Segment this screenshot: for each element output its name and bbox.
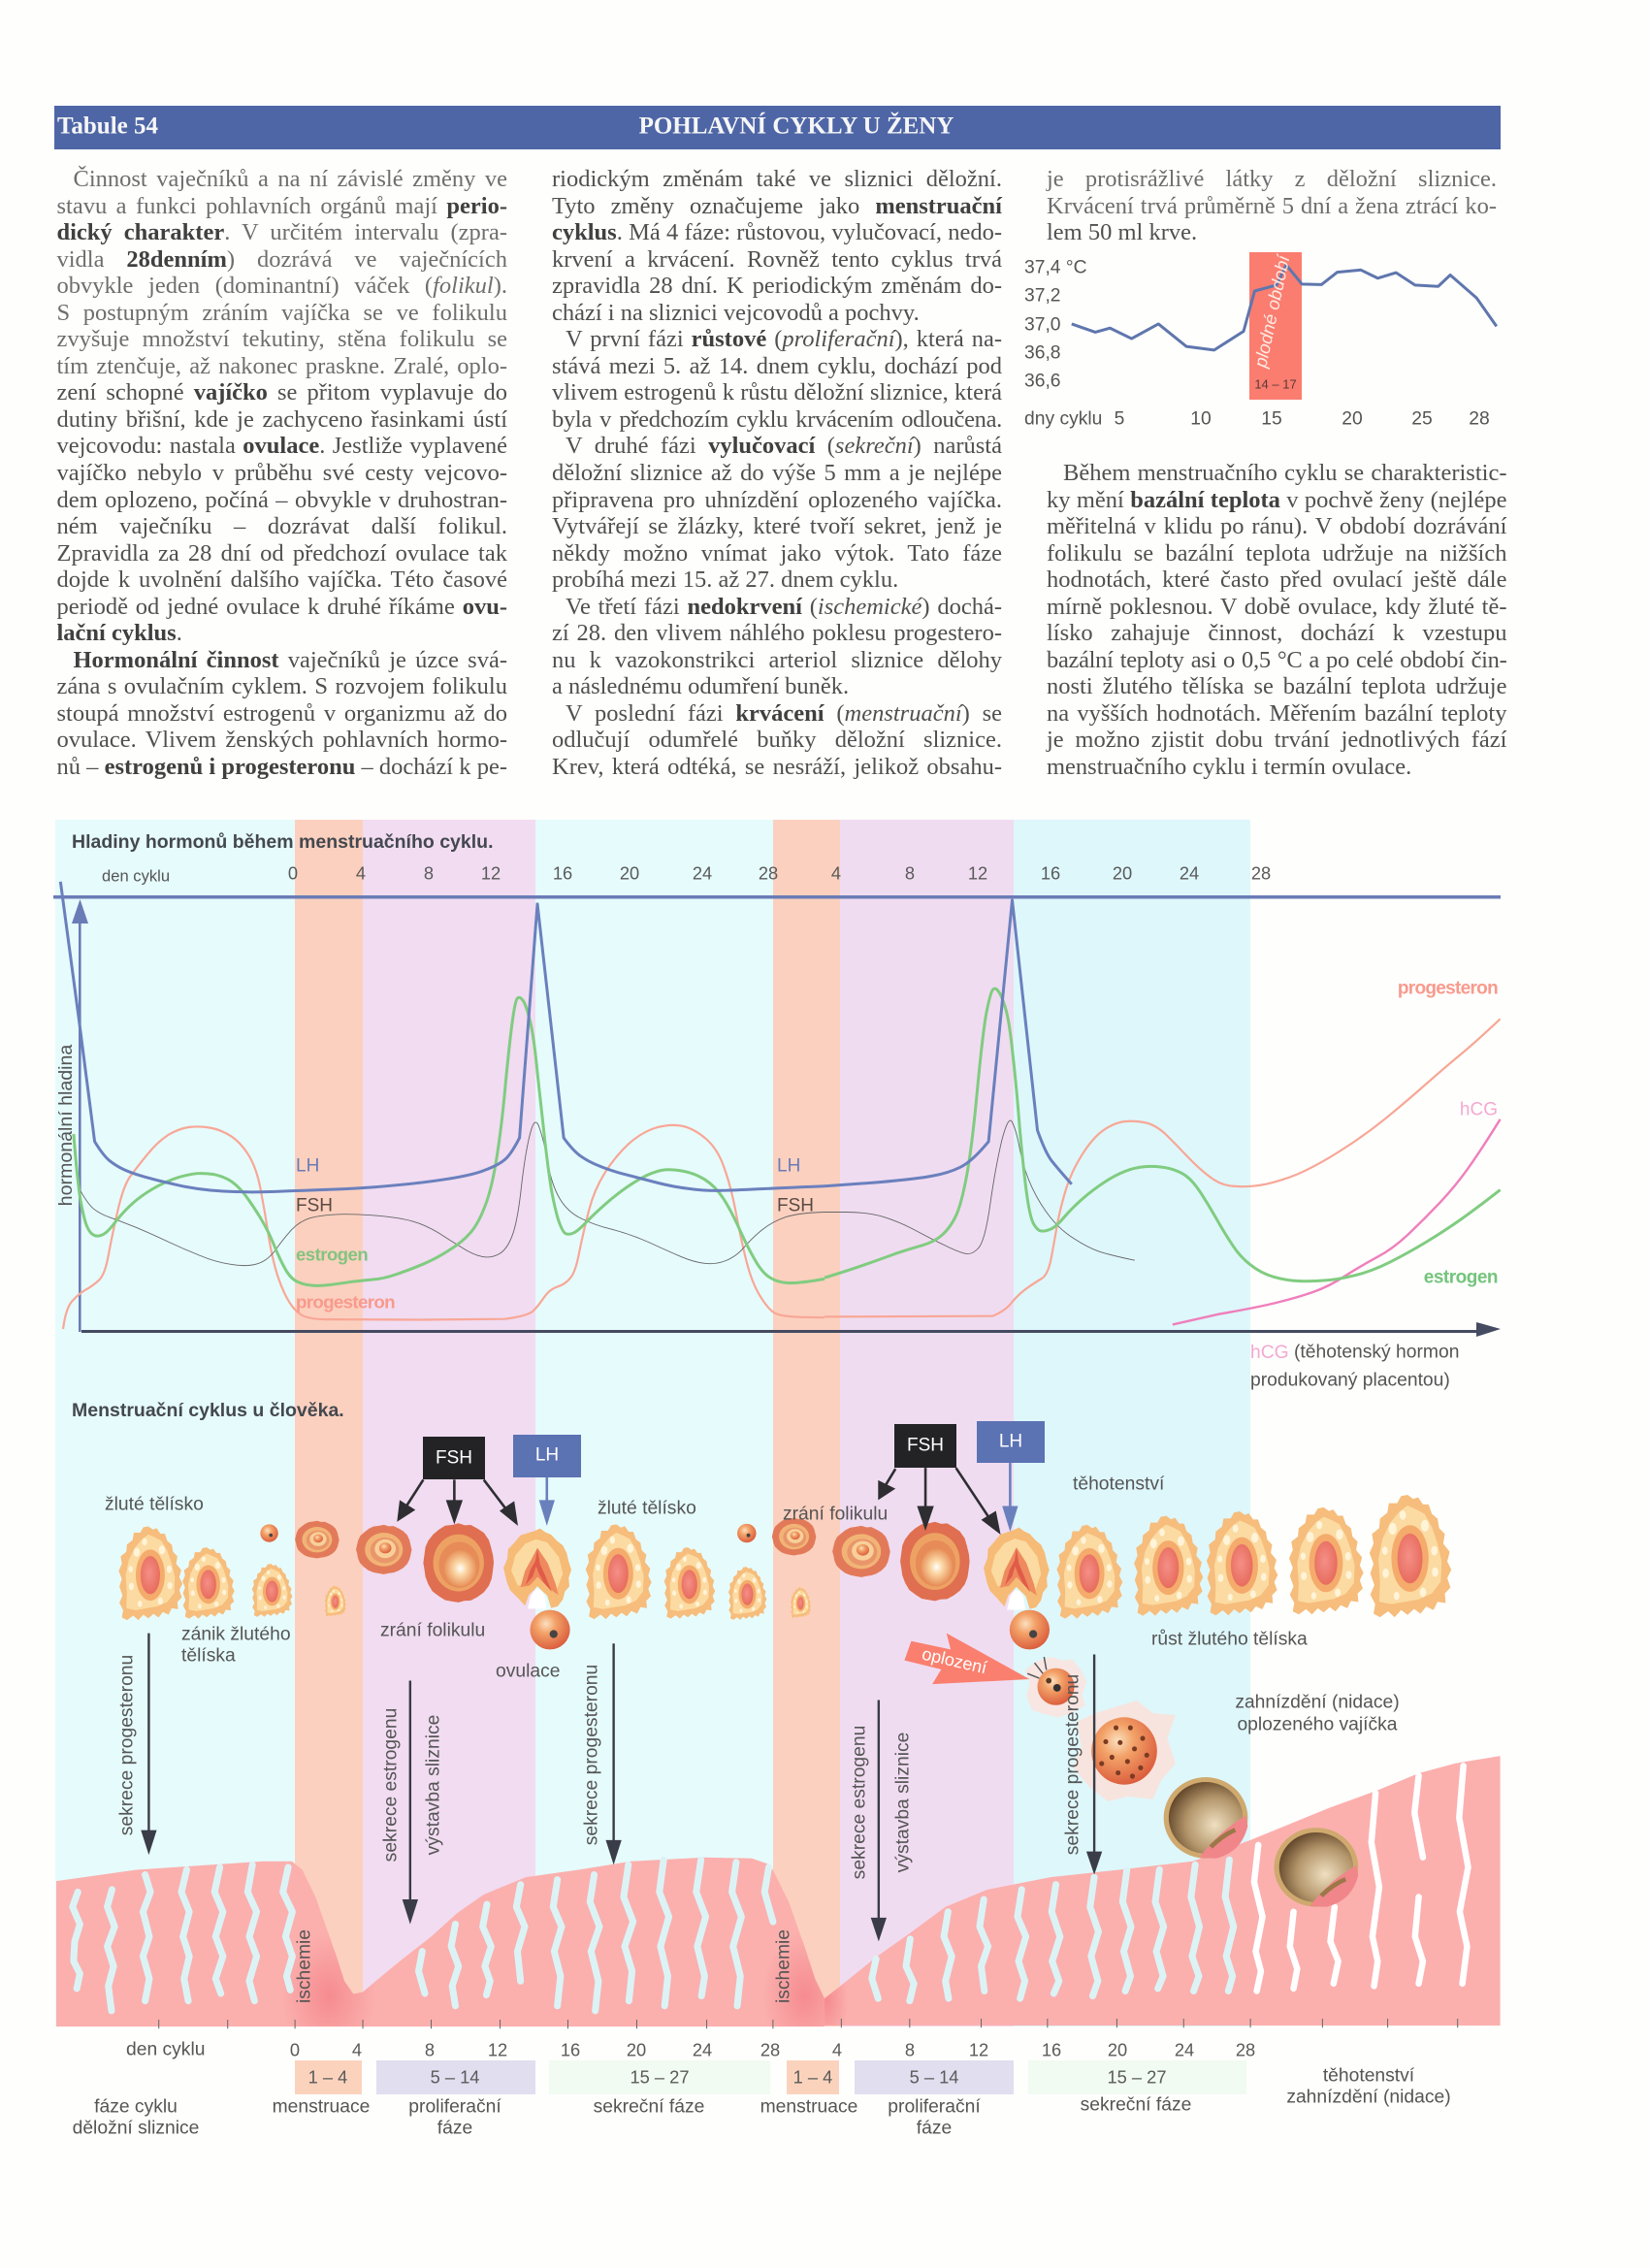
ovary and secretion labels: oplození [921,1644,988,1677]
text column 1: zvyšuje množství tekutiny, stěna folikulu se [56,326,507,352]
ovary and secretion labels: ischemie [295,1929,314,2003]
icon: blastocyst implanted [1274,1828,1358,1907]
ovary and secretion labels: ovulace [496,1661,560,1682]
phase labels: proliferační [408,2097,501,2117]
ovary and secretion labels: žluté tělísko [598,1498,696,1519]
text column 3 bottom: nosti žlutého tělíska se bazální teplota udržuje [1047,673,1507,699]
curve labels: LH [296,1156,319,1176]
chart: basal temperature: 28 [1469,409,1490,429]
ovary and secretion labels: výstavba sliznice [423,1715,444,1855]
top day axis labels: 12 [968,863,987,883]
box: FSH [423,1437,485,1479]
text column 1 [56,165,507,780]
top day axis labels: 28 [1251,863,1271,883]
curve labels: progesteron [1398,978,1498,999]
secretion arrows [141,1634,1102,1941]
text column 1: stoupá množství estrogenů v organizmu až do [56,700,507,727]
phase range boxes: 5 – 14 [910,2066,958,2088]
temperature line [1072,265,1497,350]
curve labels: FSH [296,1195,333,1216]
icon: corpus luteum regressing [118,1526,346,1620]
ovary and secretion labels: sekrece progesteronu [1063,1674,1083,1855]
phase labels: menstruace [273,2097,370,2117]
bottom day axis [126,2039,1255,2060]
text column 2: cyklus. Má 4 fáze: růstovou, vylučovací, nedo- [552,219,1002,245]
top day axis labels [102,863,1271,885]
text column 3 bottom: hodnotách, které často před ovulací ještě dále [1047,567,1507,593]
bottom day axis: 20 [627,2039,646,2060]
icon: ovulating follicle [503,1529,571,1608]
header: title: POHLAVNÍ CYKLY U ŽENY [639,113,954,140]
ovary and secretion labels: těhotenství [1073,1474,1165,1494]
bottom day axis: 16 [561,2039,580,2060]
icon: corpus luteum second cycle [586,1524,811,1620]
ovary and secretion labels: sekrece estrogenu [850,1726,869,1879]
text column 1: zána s ovulačním cyklem. S rozvojem folikulu [56,673,507,699]
phase range boxes: 15 – 27 [630,2066,689,2088]
text column 1: vejcovodu: nastala ovulace. Jestliže vyplavené [56,433,507,459]
box: LH: LH [535,1445,559,1465]
text column 2: připravena pro uhnízdění oplozeného vajíčka. [552,487,1002,513]
text column 2: V první fázi růstové (proliferační), která na- [566,326,1002,352]
top day axis labels: 16 [1041,863,1060,883]
text column 3 bottom: je možno zjistit dobu trvání jednotlivých fází [1047,727,1507,753]
cycle background bands [55,820,1250,2026]
text column 2 [552,166,1003,780]
hormone boxes and arrows, second cycle [878,1421,1045,1535]
text column 3 bottom: bazální teploty asi o 0,5 °C a po celé období čin- [1047,647,1507,673]
top day axis labels: 12 [481,863,501,883]
text column 2: Ve třetí fázi nedokrvení (ischemické) dochá- [566,594,1002,620]
chart: basal temperature: 37,4 °C [1024,258,1087,277]
chart: basal temperature [1024,252,1497,429]
phase labels [73,2066,1451,2138]
phase range boxes: 15 – 27 [1108,2066,1166,2088]
curve labels: estrogen [1424,1267,1498,1288]
phase labels: děložní sliznice [73,2119,199,2138]
ovary and secretion labels: žluté tělísko [105,1494,204,1515]
text column 2: zpravidla 28 dní. K periodickým změnám do- [552,273,1002,299]
phase range boxes: 5 – 14 [431,2066,479,2088]
text column 2: chází i na sliznici vejcovodů a pochvy. [552,300,920,326]
bottom day axis: 12 [969,2039,988,2060]
text column 2: Krev, která odtéká, se nesráží, jelikož obsahu- [552,754,1002,780]
chart: basal temperature: 5 [1115,409,1124,429]
bottom day axis: 8 [905,2039,915,2060]
curves first part [60,882,824,1329]
chart: hormone levels [53,863,1501,1391]
ovary and secretion labels: sekrece estrogenu [380,1708,402,1862]
text column 1: periodě od jedné ovulace k druhé říkáme ovu- [56,594,507,620]
arrow: fertilization [904,1634,1029,1684]
top day axis labels: 8 [905,863,915,883]
text column 1: Činnost vaječníků a na ní závislé změny ve [74,166,507,192]
curve labels [296,978,1498,1312]
text column 3 bottom [1046,460,1507,780]
icon: morula [1073,1701,1176,1801]
text column 3 bottom: folikulu se bazální teplota udržuje na nižších [1047,540,1507,567]
hormone boxes and arrows, first cycle [397,1435,581,1526]
text column 1: dojde k uvolnění dalšího vajíčka. Této časové [56,567,507,593]
arrows: hormone action [878,1463,1018,1535]
text column 3 bottom: lísko zahajuje činnost, dochází k vzestupu [1047,620,1507,646]
text column 3 bottom: mírně poklesnou. V době ovulace, kdy žluté tě- [1047,594,1507,620]
bottom day axis: 4 [352,2039,362,2060]
ovary and secretion labels: tělíska [181,1645,236,1667]
text column 2: děložní sliznice až do výše 5 mm a je nejlépe [552,460,1002,486]
chart: basal temperature: 36,6 [1024,371,1061,392]
phase range boxes [295,2060,1246,2094]
text column 2: zí 28. den vlivem náhlého poklesu progestero- [552,620,1002,646]
text column 3 bottom: ky mění bazální teplota v pochvě ženy (nejlépe [1047,487,1506,513]
curve labels: LH [777,1156,800,1176]
text column 3 top: je protisrážlivé látky z děložní sliznice. [1047,166,1497,192]
text column 1: zení schopné vajíčko se přitom vyplavuje do [56,379,507,405]
bottom day axis: den cyklu [126,2039,205,2060]
text column 2: V poslední fázi krvácení (menstruační) se [566,700,1002,727]
box: FSH: FSH [436,1447,472,1469]
top day axis labels: 4 [356,863,366,883]
bottom day axis: 28 [1236,2039,1255,2060]
text column 3 top: Krvácení trvá průměrně 5 dní a žena ztrácí ko- [1047,193,1497,219]
text column 3 bottom: Během menstruačního cyklu se charakteristic- [1063,460,1507,486]
text column 1: dutiny břišní, kde je zachyceno řasinkami ústí [56,406,507,433]
text column 1: vajíčko nebylo v průběhu své cesty vejcovo- [56,460,507,486]
box: FSH: FSH [907,1436,944,1455]
phase labels: fáze [917,2119,952,2138]
text column 1: dický charakter. V určitém intervalu (zpra- [56,219,507,245]
text column 1: lační cyklus. [56,620,182,646]
text column 2: riodickým změnám také ve sliznici děložní. [552,166,1002,192]
bottom day axis: 28 [760,2039,780,2060]
top day axis labels: 28 [759,863,778,883]
ovary and secretion labels: sekrece progesteronu [582,1665,601,1845]
chart: basal temperature: 20 [1342,409,1363,429]
header bar [54,106,1501,149]
text column 2: Tyto změny označujeme jako menstruační [552,193,1002,219]
y axis label: hormonální hladina [55,1045,77,1206]
ovary and secretion labels: oplozeného vajíčka [1237,1715,1398,1734]
phase range boxes: 1 – 4 [793,2066,832,2088]
box: LH [977,1421,1045,1463]
text column 2: vlivem estrogenů k růstu děložní sliznice, která [552,379,1002,405]
ovary and secretion labels [105,1474,1400,2003]
phase labels: zahnízdění (nidace) [1286,2088,1451,2107]
ovary and secretion labels: ischemie [774,1929,793,2003]
text column 3 bottom: na vyšších hodnotách. Měřením bazální teploty [1047,700,1507,727]
chart: basal temperature: 36,8 [1024,343,1061,363]
curve labels: estrogen [296,1244,368,1265]
text column 3 top [1046,166,1497,245]
chart: basal temperature: 37,2 [1024,285,1061,307]
ovary and secretion labels: růst žlutého tělíska [1151,1628,1308,1649]
text column 1: Hormonální činnost vaječníků je úzce svá- [74,647,507,673]
bottom day axis: 24 [1175,2039,1194,2060]
text column 3 top: lem 50 ml krve. [1047,219,1197,245]
bottom day axis: 0 [290,2039,300,2060]
chart: basal temperature: 15 [1261,409,1282,429]
text column 2: stává mezi 5. až 14. dnem cyklu, dochází pod [552,353,1002,379]
phase labels: sekreční fáze [1081,2095,1191,2115]
curve labels: hCG [1460,1100,1498,1119]
arrows: hormone action [397,1477,555,1526]
chart: basal temperature: 10 [1190,409,1212,429]
ovary and secretion labels: zrání folikulu [380,1620,485,1641]
text column 2: V druhé fázi vylučovací (sekreční) narůstá [566,433,1002,459]
text column 1: dem oplozeno, počíná – obvykle v druhostran- [56,487,507,513]
icon: growing corpus luteum [1056,1495,1451,1619]
text column 3 bottom: měřitelná v klidu po ránu). V období dozrávání [1047,513,1507,539]
text column 2: byla v předchozím cyklu krvácením odloučena. [552,406,1002,433]
day ticks [159,2019,1458,2028]
text column 2: a následnému odumření buněk. [552,673,849,699]
top day axis labels: 4 [831,863,841,883]
top day axis labels: 24 [693,863,712,883]
bottom day axis: 24 [693,2039,712,2060]
endometrium [56,1756,1501,2060]
hCG note: hCG (těhotenský hormon [1250,1343,1459,1362]
text column 1: stavu a funkci pohlavních orgánů mají perio- [56,193,507,219]
ovary and secretion labels: zahnízdění (nidace) [1235,1692,1400,1713]
top day axis labels: 0 [288,863,298,883]
icon: ovulating follicle [984,1528,1050,1609]
icon: growing follicles [832,1522,970,1601]
text column 1: ovulace. Vlivem ženských pohlavních hormo- [56,727,507,753]
ovary and secretion labels: výstavba sliznice [892,1733,914,1872]
phase labels: proliferační [888,2097,981,2117]
text column 1: Zpravidla za 28 dní od předchozí ovulace tak [56,540,507,567]
heading: hormone levels: Hladiny hormonů během menstruačního cyklu. [72,831,493,853]
top day axis labels: 16 [553,863,572,883]
text column 2: Vytvářejí se žlázky, které tvoří sekret, jenž je [552,513,1002,539]
chart: basal temperature: 37,0 [1024,314,1061,336]
box: FSH [894,1424,956,1468]
text column 2: krvení a krvácení. Rovněž tento cyklus trvá [552,246,1002,273]
ovary and secretion labels: zrání folikulu [783,1504,888,1525]
chart: basal temperature: 14 – 17 [1254,376,1297,392]
text column 1: tím ztenčuje, až nakonec praskne. Zralé, oplo- [56,353,507,379]
bottom day axis: 4 [832,2039,842,2060]
fertile period label: plodné období [1249,252,1294,371]
phase labels: fáze cyklu [94,2097,178,2117]
text column 3 bottom: menstruačního cyklu i termín ovulace. [1047,754,1411,780]
heading: menstrual cycle: Menstruační cyklus u člověka. [72,1400,344,1421]
ovary and secretion labels: sekrece progesteronu [116,1655,138,1835]
bottom day axis: 12 [488,2039,507,2060]
top day axis labels: 20 [1113,863,1132,883]
text column 1: obvykle jeden (dominantní) váček (folikul). [56,273,507,299]
icon: blastocyst attaching [1164,1777,1247,1859]
axes [72,899,1501,1337]
top day axis labels: 20 [620,863,639,883]
text column 1: ném vaječníku – dozrávat další folikul. [56,513,507,539]
bottom day axis: 16 [1042,2039,1061,2060]
phase labels: fáze [437,2119,472,2138]
top day axis labels: 8 [424,863,434,883]
icon: follicle maturation [260,1521,494,1603]
text column 2: odlučují odumřelé buňky děložní sliznice. [552,727,1002,753]
bottom day axis: 8 [425,2039,435,2060]
top day axis labels: den cyklu [102,867,170,885]
ovarian cycle, second and pregnancy [832,1495,1451,1907]
box: LH [513,1435,581,1477]
chart: hormone levels: produkovaný placentou) [1250,1370,1450,1391]
text column 1: S postupným zráním vajíčka se ve folikulu [56,300,507,326]
icon: released egg [1010,1610,1050,1649]
phase labels: menstruace [760,2097,857,2117]
curves second part [824,900,1501,1324]
bottom day axis: 20 [1108,2039,1127,2060]
ovarian cycle, first [118,1518,816,1649]
top day axis labels: 24 [1180,863,1199,883]
text column 2: někdy možno vnímat jako výtok. Tato fáze [552,540,1002,567]
chart: basal temperature: dny cyklu [1024,409,1102,429]
curve labels: FSH [777,1195,814,1216]
curve labels: progesteron [296,1292,395,1312]
text column 1: vidla 28denním) dozrává ve vaječnících [56,246,507,273]
text column 2: nu k vazokonstrikci arteriol sliznice dělohy [552,647,1002,673]
icon: second follicle start [737,1518,816,1555]
text column 2: probíhá mezi 15. až 27. dnem cyklu. [552,567,898,593]
phase labels: těhotenství [1323,2066,1415,2086]
icon: released egg [530,1610,570,1649]
box: LH: LH [999,1432,1022,1451]
phase range boxes: 1 – 4 [308,2066,347,2088]
text column 1: nů – estrogenů i progesteronu – dochází k pe- [56,754,507,780]
phase labels: sekreční fáze [594,2097,704,2117]
chart: basal temperature: 25 [1411,409,1433,429]
header: plate number: Tabule 54 [57,113,158,140]
ovary and secretion labels: zánik žlutého [181,1624,291,1645]
icon: fertilized egg [1025,1657,1086,1718]
